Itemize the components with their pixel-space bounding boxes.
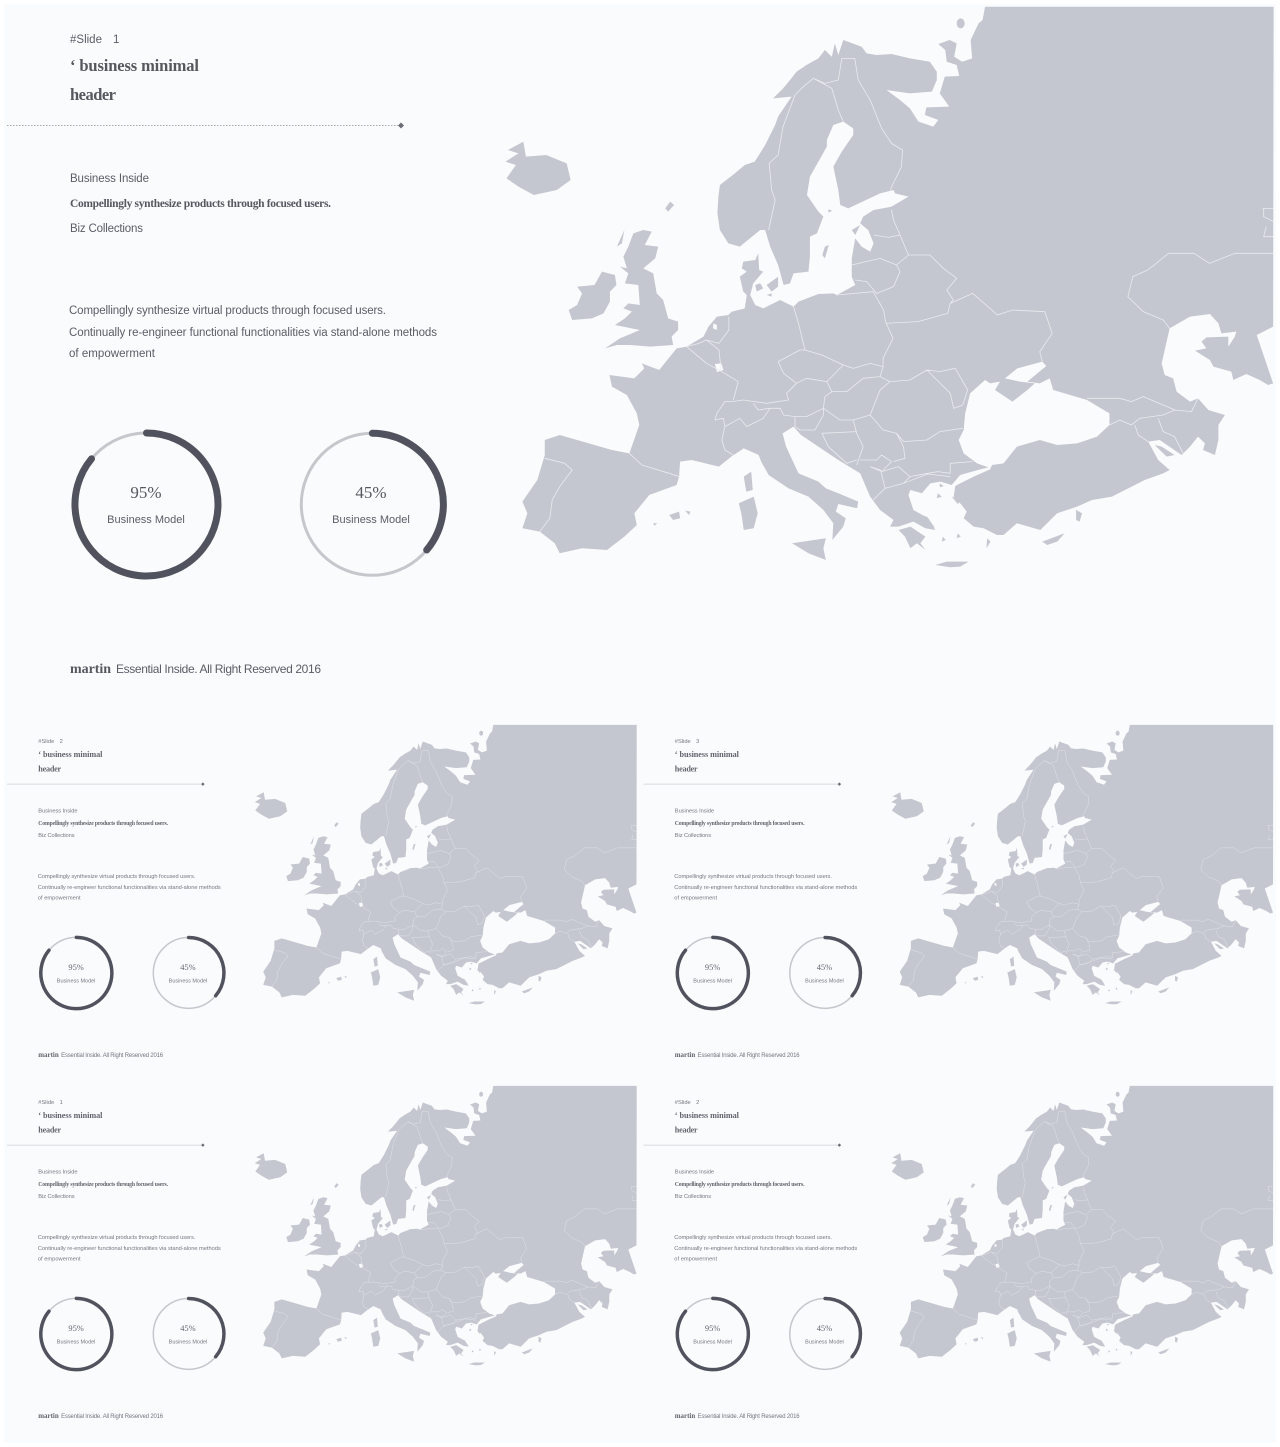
donut chart: 95%: [75, 433, 218, 576]
donut 45%: 45%: [180, 962, 196, 972]
thumbnail footer: [675, 1412, 800, 1420]
body paragraph: of empowerment: [69, 348, 156, 360]
panel: slide thumbnail 2: [7, 725, 637, 1059]
thumbnail text: header: [38, 764, 62, 773]
thumbnail text: Compellingly synthesize virtual products through focused users.: [674, 874, 832, 880]
donut 95%: [677, 1298, 748, 1370]
map of Europe: [505, 7, 1274, 567]
thumbnail text: Compellingly synthesize products through focused users.: [675, 1182, 805, 1188]
donut 45%: [153, 938, 224, 1008]
donut 95%: 95%: [68, 962, 84, 972]
thumbnail text: Continually re-engineer functional functionalities via stand-alone methods: [674, 885, 857, 891]
thumbnail text: Biz Collections: [38, 1194, 75, 1200]
donut 45%: Business Model: [805, 978, 844, 984]
thumbnail footer: martin: [675, 1412, 695, 1420]
donut 45%: 45%: [817, 962, 832, 972]
panel: slide thumbnail 2 repeat: [643, 1086, 1273, 1420]
slide number: #Slide: [70, 34, 102, 46]
thumbnail text: [643, 1100, 857, 1263]
donut 95%: [41, 937, 112, 1009]
subheading: serif tagline: Compellingly synthesize products through focused users.: [70, 198, 331, 210]
thumbnail text: [7, 1100, 221, 1263]
thumbnail text: of empowerment: [38, 1257, 81, 1263]
donut 95%: [41, 1298, 112, 1370]
thumbnail text: [643, 739, 857, 902]
divider with diamond: [7, 122, 404, 128]
donut 45%: Business Model: [805, 1339, 844, 1345]
thumbnail text: Compellingly synthesize virtual products through focused users.: [38, 1235, 196, 1241]
donut 95%: Business Model: [57, 1339, 95, 1345]
thumbnail map: [891, 725, 1273, 1004]
heading line two: header: [70, 85, 116, 104]
footer: Essential Inside. All Right Reserved 2016: [116, 662, 321, 676]
panel: slide thumbnail 3: [643, 725, 1273, 1059]
thumbnail text: 3: [696, 739, 699, 745]
thumbnail map: [255, 1086, 637, 1365]
donut 95%: Business Model: [57, 978, 95, 984]
thumbnail map: [255, 725, 637, 1004]
thumbnail text: Business Inside: [675, 1169, 714, 1175]
donut 95%: [677, 937, 748, 1009]
donut 45%: 45%: [180, 1323, 196, 1333]
thumbnail text: [7, 739, 221, 902]
footer: martin: [70, 662, 111, 677]
subheading: biz collections: Biz Collections: [70, 223, 143, 235]
thumbnail text: 2: [60, 739, 63, 745]
thumbnail text: 2: [696, 1100, 699, 1106]
thumbnail text: Biz Collections: [675, 833, 711, 839]
thumbnail text: Business Inside: [38, 808, 78, 814]
panel: slide thumbnail 1: [7, 1086, 637, 1420]
thumbnail footer: Essential Inside. All Right Reserved 2016: [698, 1414, 800, 1420]
thumbnail map: [891, 1086, 1273, 1365]
thumbnail text: Biz Collections: [675, 1194, 711, 1200]
thumbnail text: 1: [60, 1100, 63, 1106]
donut 45%: Business Model: [169, 978, 207, 984]
thumbnail text: of empowerment: [674, 896, 717, 902]
thumbnail text: Compellingly synthesize products through focused users.: [38, 821, 169, 827]
donut 95%: 95%: [705, 962, 720, 972]
donut chart: 45%: Business Model: [332, 514, 410, 526]
thumbnail text: ‘ business minimal: [675, 1111, 740, 1120]
thumbnail text: #Slide: [675, 739, 691, 745]
thumbnail text: of empowerment: [38, 896, 81, 902]
donut 45%: [153, 1299, 224, 1369]
thumbnail text: #Slide: [675, 1100, 691, 1106]
thumbnail text: header: [38, 1125, 62, 1134]
thumbnail text: Compellingly synthesize products through focused users.: [675, 821, 805, 827]
thumbnail text: ‘ business minimal: [675, 750, 740, 759]
donut 45%: 45%: [817, 1323, 832, 1333]
heading line one: ‘ business minimal: [70, 56, 199, 75]
thumbnail text: Biz Collections: [38, 833, 75, 839]
donut 45%: [790, 1299, 860, 1369]
thumbnail text: header: [675, 764, 698, 773]
donut 95%: Business Model: [693, 1339, 732, 1345]
donut 95%: 95%: [68, 1323, 84, 1333]
thumbnail footer: Essential Inside. All Right Reserved 2016: [61, 1414, 164, 1420]
thumbnail footer: Essential Inside. All Right Reserved 2016: [61, 1053, 164, 1059]
thumbnail footer: Essential Inside. All Right Reserved 2016: [698, 1053, 800, 1059]
panel: main slide: [7, 7, 1274, 677]
donut chart: 95%: 95%: [130, 483, 162, 502]
donut 45%: [790, 938, 860, 1008]
donut chart: 45%: [301, 433, 443, 575]
body paragraph: Continually re-engineer functional functionalities via stand-alone methods: [69, 327, 437, 339]
thumbnail text: header: [675, 1125, 698, 1134]
subheading: business inside: Business Inside: [70, 173, 149, 185]
thumbnail text: #Slide: [38, 1100, 54, 1106]
thumbnail footer: martin: [38, 1051, 59, 1059]
thumbnail text: Business Inside: [38, 1169, 78, 1175]
donut chart: 45%: 45%: [355, 483, 387, 502]
donut 95%: Business Model: [693, 978, 732, 984]
body paragraph: [69, 305, 437, 360]
thumbnail footer: martin: [675, 1051, 695, 1059]
thumbnail footer: [38, 1412, 164, 1420]
body paragraph: Compellingly synthesize virtual products through focused users.: [69, 305, 386, 317]
donut chart: 95%: Business Model: [107, 514, 185, 526]
thumbnail text: Business Inside: [675, 808, 714, 814]
donut 45%: Business Model: [169, 1339, 207, 1345]
thumbnail text: Compellingly synthesize virtual products through focused users.: [38, 874, 196, 880]
donut 95%: 95%: [705, 1323, 720, 1333]
thumbnail text: Compellingly synthesize virtual products through focused users.: [674, 1235, 832, 1241]
slide number: 1: [113, 34, 119, 46]
thumbnail text: #Slide: [38, 739, 54, 745]
thumbnail text: ‘ business minimal: [38, 1111, 103, 1120]
thumbnail text: of empowerment: [674, 1257, 717, 1263]
thumbnail text: Continually re-engineer functional functionalities via stand-alone methods: [674, 1246, 857, 1252]
thumbnail text: Compellingly synthesize products through focused users.: [38, 1182, 169, 1188]
thumbnail footer: [675, 1051, 800, 1059]
thumbnail footer: martin: [38, 1412, 59, 1420]
thumbnail footer: [38, 1051, 164, 1059]
thumbnail text: Continually re-engineer functional functionalities via stand-alone methods: [38, 1246, 221, 1252]
thumbnail text: ‘ business minimal: [38, 750, 103, 759]
thumbnail text: Continually re-engineer functional functionalities via stand-alone methods: [38, 885, 221, 891]
